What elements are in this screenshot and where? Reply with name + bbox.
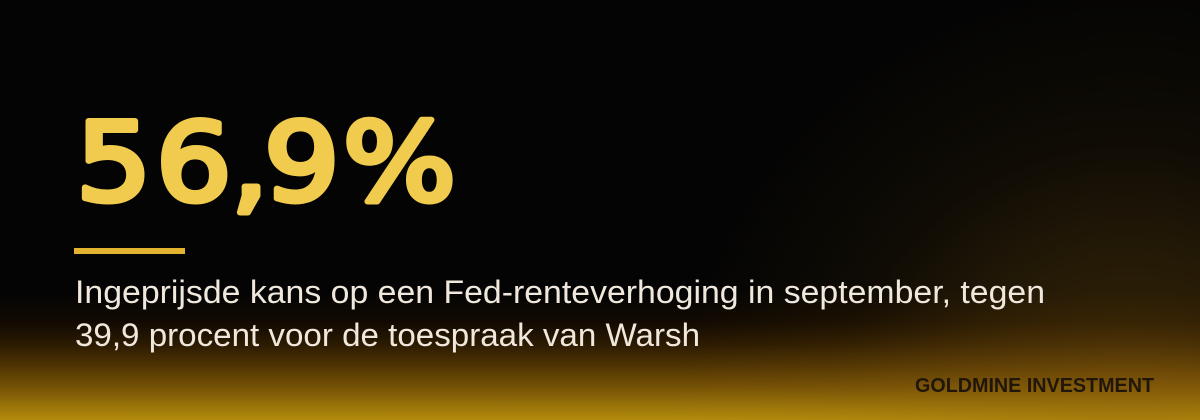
background glow: bottom band <box>0 290 1200 420</box>
description text <box>75 274 1045 353</box>
accent rule <box>74 248 185 254</box>
description text: Ingeprijsde kans op een Fed-renteverhoging in september, tegen <box>75 274 1045 310</box>
headline statistic: 56,9% <box>76 100 456 226</box>
description text: 39,9 procent voor de toespraak van Warsh <box>75 317 700 353</box>
brand label: GOLDMINE INVESTMENT <box>915 375 1154 397</box>
